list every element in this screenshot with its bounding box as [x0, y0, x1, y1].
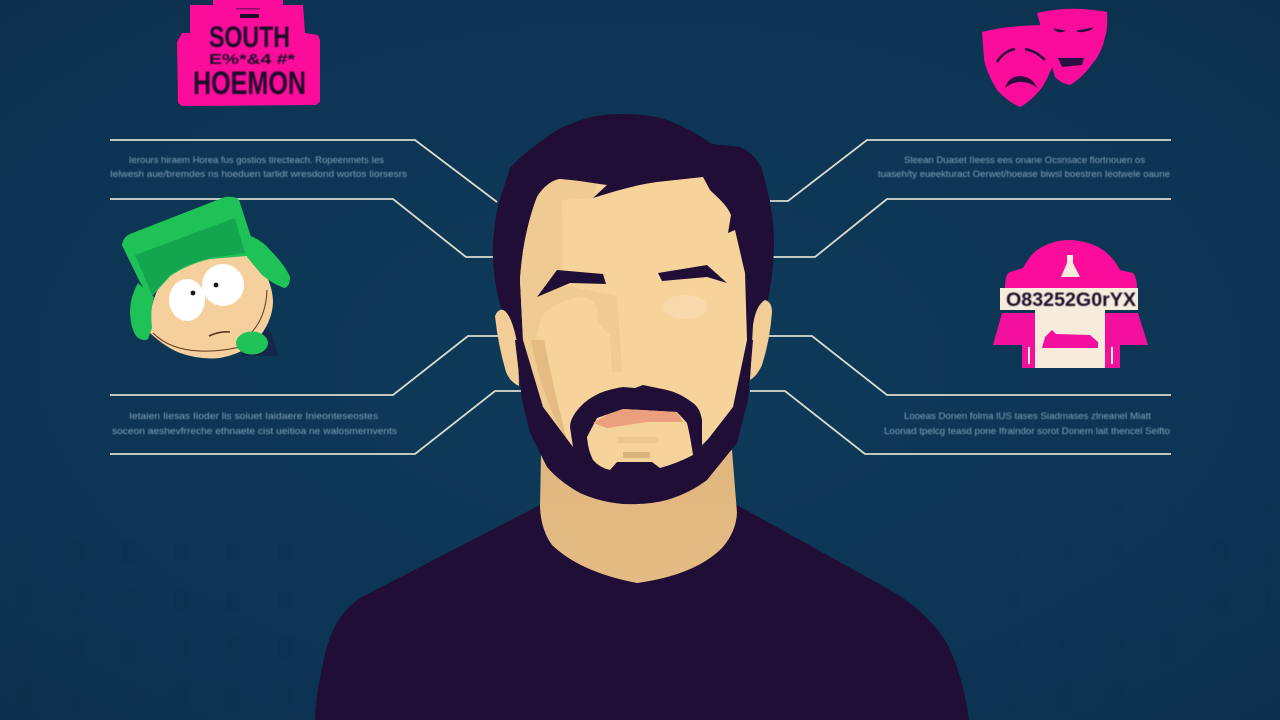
eyes: [202, 264, 244, 306]
text block: bottom right: Looeas Donen folma lUS tases Siadmases zlneanel Miatt: [904, 411, 1151, 422]
right ear flap: [247, 235, 290, 288]
mouth: [209, 332, 230, 336]
text block: top left: Ielwesh aue/bremdes ns hoeduen tarlidt wresdond wortos Iiorsesrs: [110, 169, 407, 180]
bed: [1042, 330, 1098, 348]
right ear: [750, 300, 772, 380]
head: [150, 250, 273, 358]
connector lines: right: [750, 140, 1171, 454]
icon: pink sign: SOUTH: [209, 21, 290, 54]
icon: cartoon character with green hat: [123, 198, 290, 358]
beard: [515, 340, 753, 504]
chin lines: [618, 437, 658, 443]
text block: bottom right: [884, 411, 1170, 437]
text block: top right: Sleean Duaset IIeess ees onane Ocsnsace flortnouen os: [904, 155, 1145, 166]
connector lines: left: [110, 140, 522, 454]
left eyebrow: [537, 270, 606, 297]
icon: pink sign: [177, 0, 320, 106]
text block: bottom left: Ietaien Iiesas Iioder lis soiuet Iaidaere Inieonteseostes: [129, 411, 378, 422]
face: [520, 177, 747, 505]
shirt: [315, 505, 969, 720]
text block: bottom right: Loonad tpelcg teasd pone Ifraindor sorot Donem lait thencel Seifto: [884, 426, 1170, 437]
character shadow: [240, 325, 278, 356]
hair: [493, 114, 774, 345]
face shading: [520, 179, 622, 440]
text block: top right: [878, 155, 1170, 180]
icon: pink building: [993, 240, 1148, 368]
left jaw shadow: [531, 340, 567, 440]
text block: top left: Ierours hiraem Horea fus gostios tirecteach. Ropeenmets Ies: [129, 155, 384, 166]
right cheek highlight: [663, 295, 707, 319]
icon: pink sign: HOEMON: [193, 65, 306, 101]
right eyebrow: [658, 265, 727, 283]
person portrait: [315, 114, 969, 720]
hat: [123, 198, 250, 297]
left ear flap: [130, 283, 154, 340]
text block: bottom left: [112, 411, 397, 437]
lip: [593, 409, 683, 428]
icon: theatre masks: [982, 9, 1107, 107]
pompom: [236, 332, 268, 354]
icon: pink sign: E%*&4 #*: [209, 51, 295, 68]
text block: top right: tuaseh/ty eueekturact Oerwet/hoease biwsl boestren Ieotwele oaune: [878, 169, 1170, 180]
left ear: [495, 310, 519, 386]
bottle: [1061, 255, 1080, 277]
text block: bottom left: soceon aeshevfrreche ethnaete cist ueitioa ne walosmernvents: [112, 426, 397, 437]
text block: top left: [110, 155, 407, 180]
chin patch: [587, 409, 693, 470]
banner text: O83252G0rYX: [1006, 290, 1136, 311]
neck: [540, 450, 737, 583]
